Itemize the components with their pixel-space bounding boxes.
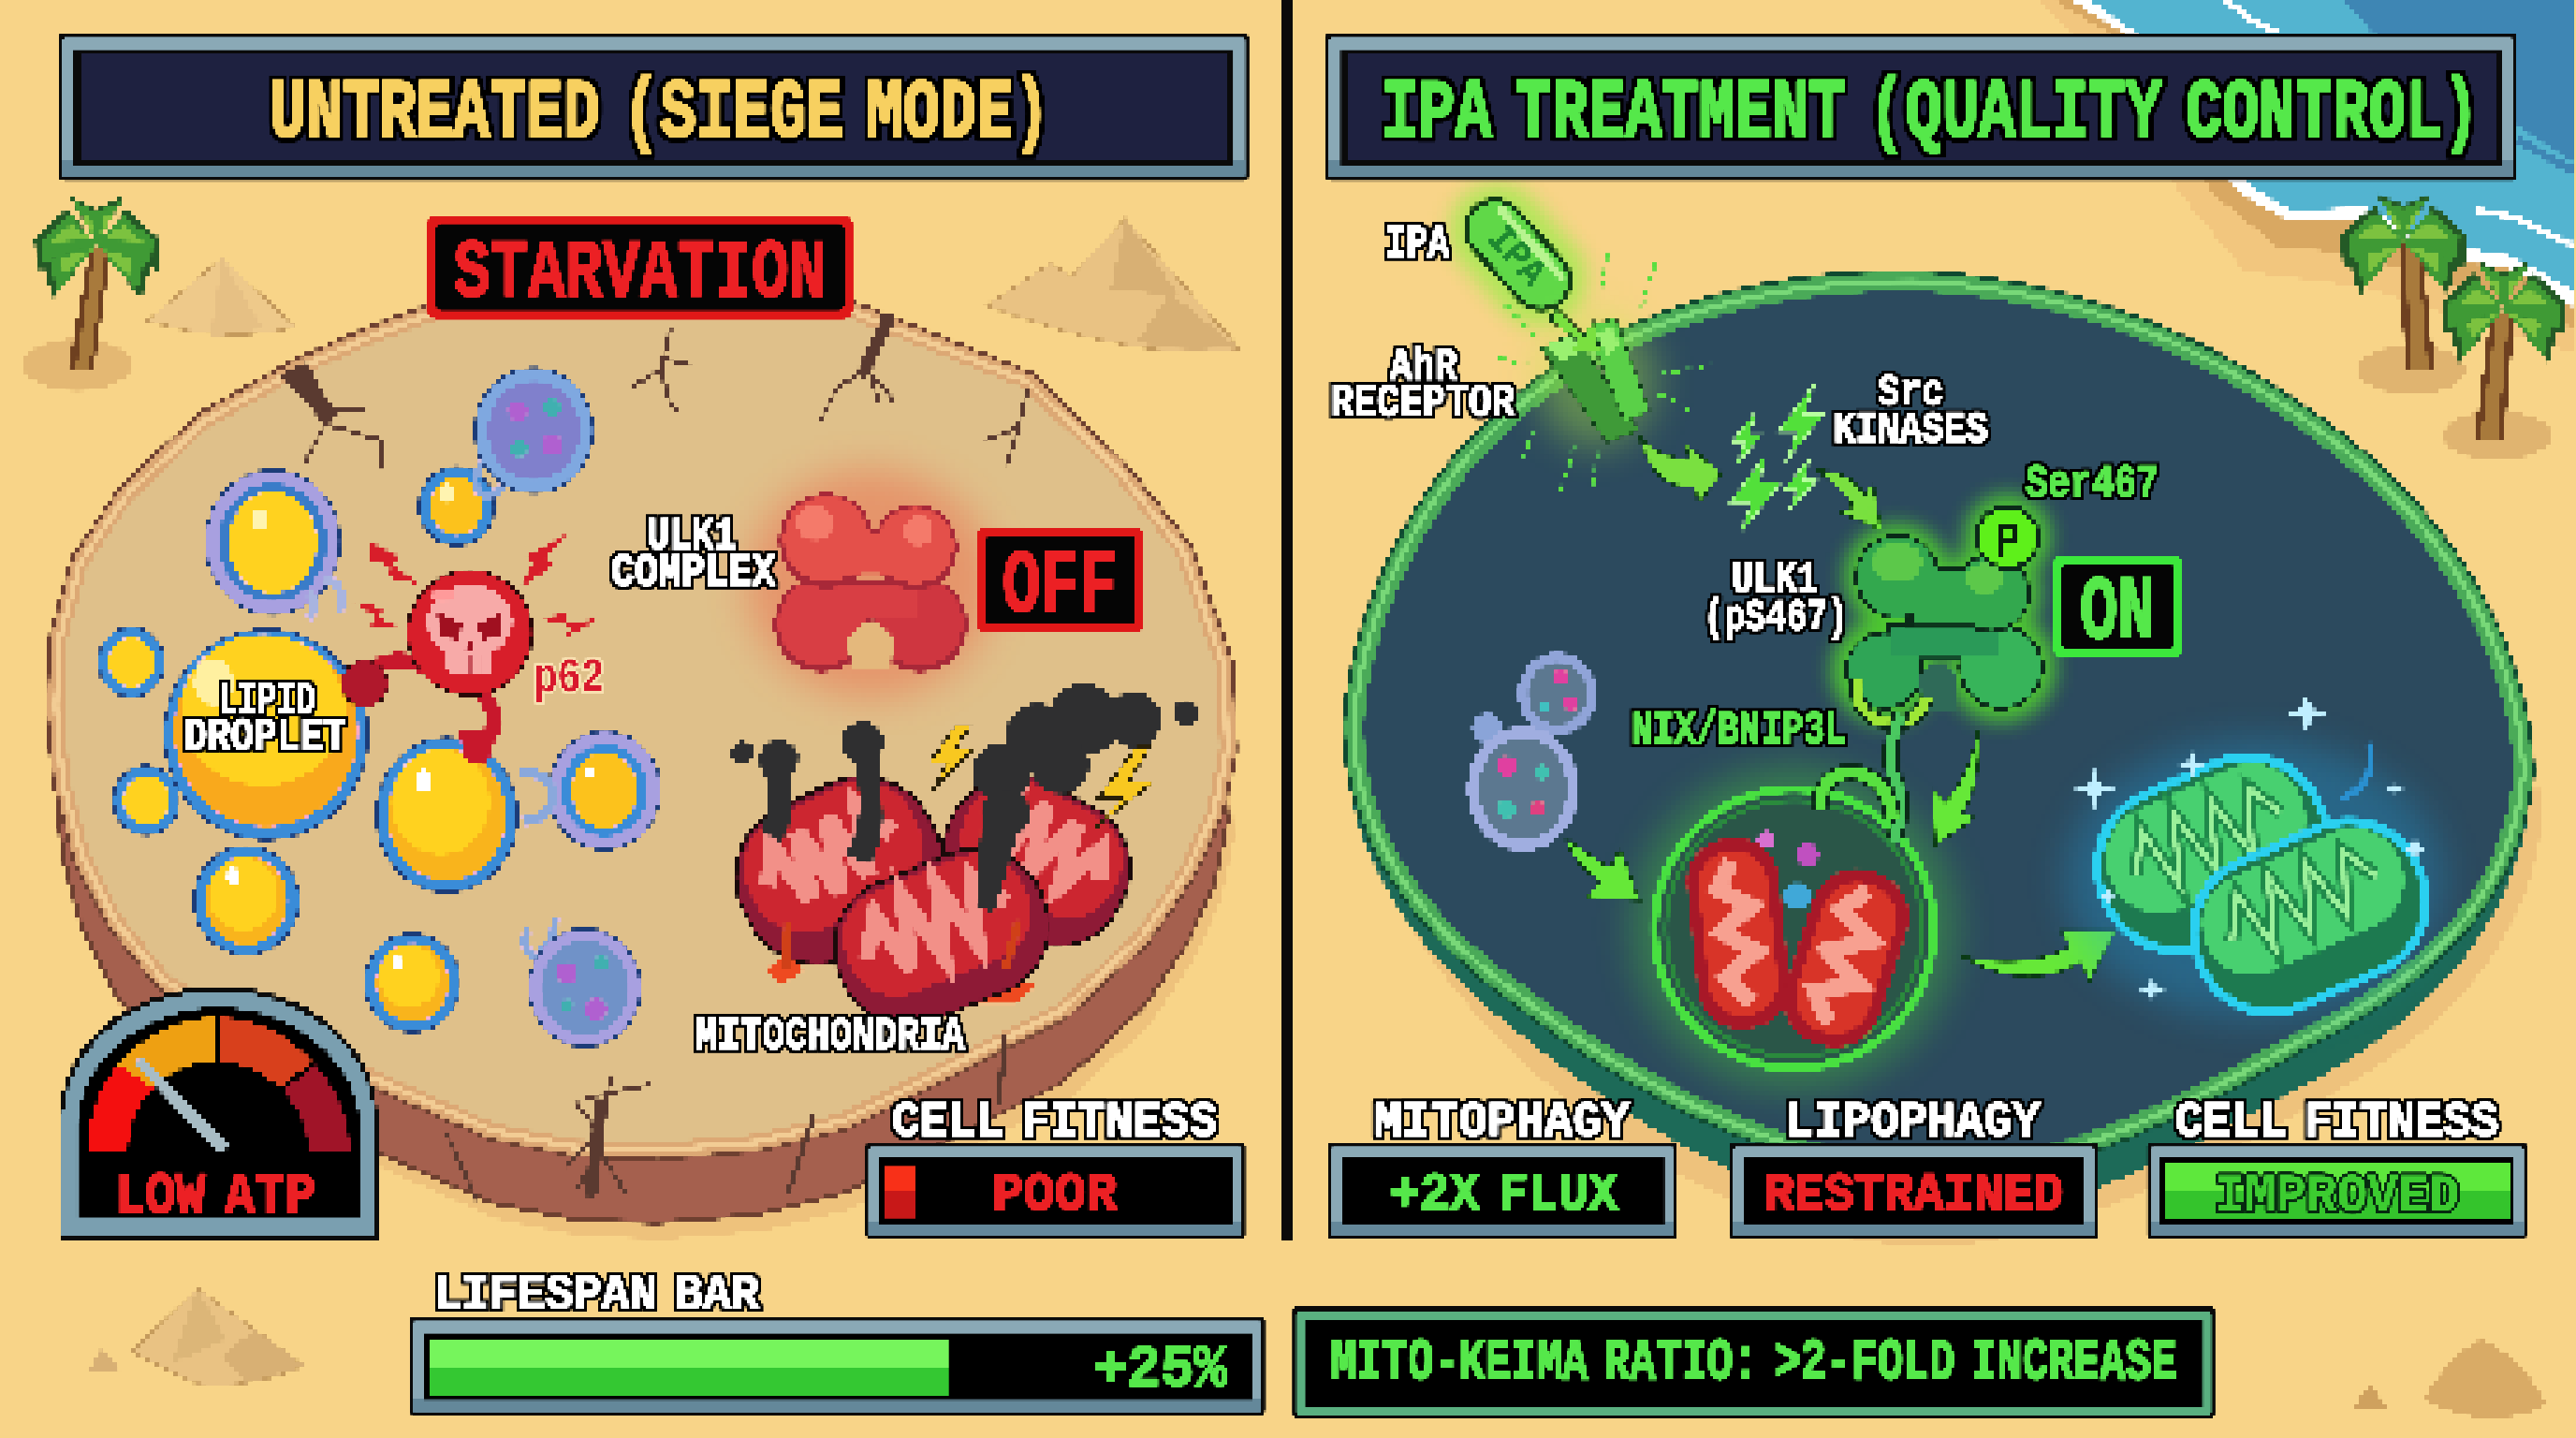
healthy mitochondria bbox=[2065, 694, 2455, 1042]
label: src kinases bbox=[1834, 369, 1988, 456]
title bar: ipa treatment bbox=[1325, 33, 2517, 181]
icon: p62 skull bbox=[342, 535, 600, 766]
arrows: flow to autophagosome and to healthy mitochondria bbox=[1566, 729, 2116, 981]
ulk1 active complex (green) with P: P bbox=[1995, 514, 2021, 570]
ulk1 active complex (green) with P bbox=[1832, 494, 2056, 723]
label: lipid droplet: LIPID bbox=[218, 675, 315, 727]
panel: untreated (siege mode) bbox=[56, 33, 1249, 1240]
label: lipophagy: LIPOPHAGY bbox=[1786, 1094, 2041, 1151]
lysosomes bbox=[419, 368, 640, 1047]
badge: off: OFF bbox=[1003, 536, 1117, 638]
badge: on: ON bbox=[2080, 563, 2156, 665]
label: ahr receptor: RECEPTOR bbox=[1331, 377, 1515, 430]
membrane cracks bbox=[283, 315, 1027, 1199]
label: ipa: IPA bbox=[1385, 218, 1449, 271]
label: mitophagy: MITOPHAGY bbox=[1373, 1094, 1630, 1151]
label: cell fitness (treated): CELL FITNESS bbox=[2175, 1094, 2499, 1151]
atp gauge frame bbox=[59, 986, 378, 1240]
label: src kinases: KINASES bbox=[1834, 406, 1988, 456]
label: ahr receptor bbox=[1331, 341, 1515, 430]
icon: src kinase sparks bbox=[1730, 383, 1823, 535]
smoke plumes bbox=[731, 683, 1199, 912]
cell: healthy dark cytoplasm with green membrane bbox=[1344, 271, 2543, 1246]
label: ulk1 complex: COMPLEX bbox=[611, 547, 776, 599]
label: ahr receptor: AhR bbox=[1390, 341, 1457, 393]
cell: starving, cracked membrane bbox=[56, 313, 1234, 1240]
status box: restrained: RESTRAINED bbox=[1764, 1166, 2063, 1226]
autophagosome with damaged mitochondria bbox=[1633, 715, 1955, 1090]
icon: ipa pill bbox=[1430, 164, 1606, 345]
status box: poor bbox=[866, 1142, 1245, 1240]
icon: ahr receptor bbox=[1499, 255, 1712, 493]
label: ulk1 complex: ULK1 bbox=[648, 510, 736, 563]
damaged mitochondria bbox=[710, 751, 1154, 1047]
callout: mito-keima ratio: MITO-KEIMA RATIO: >2-FOLD INCREASE bbox=[1331, 1329, 2177, 1397]
label: ipa on pill: IPA bbox=[1477, 217, 1555, 297]
lightning bolts bbox=[929, 725, 1153, 829]
badge: starvation bbox=[427, 215, 853, 321]
label: cell fitness (untreated): CELL FITNESS bbox=[892, 1094, 1218, 1151]
label: lifespan bar: LIFESPAN BAR bbox=[433, 1267, 759, 1323]
label: mitochondria: MITOCHONDRIA bbox=[695, 1010, 965, 1063]
label: nix/bnip3l: NIX/BNIP3L bbox=[1632, 704, 1847, 756]
label: src kinases: Src bbox=[1878, 369, 1943, 418]
label: ulk1 ps467: (pS467) bbox=[1704, 594, 1848, 643]
palm trees, right bbox=[2341, 192, 2566, 461]
callout: mito-keima ratio bbox=[1293, 1307, 2215, 1418]
label: ulk1 complex bbox=[611, 510, 776, 599]
status box: improved: IMPROVED bbox=[2215, 1167, 2459, 1228]
label: ulk1 ps467: ULK1 bbox=[1732, 556, 1819, 606]
vesicles bbox=[1467, 653, 1597, 851]
panel: ipa treatment (quality control) bbox=[1325, 33, 2543, 1246]
footer metrics bbox=[409, 1267, 2215, 1418]
label: ser467: Ser467 bbox=[2026, 458, 2159, 510]
label: lipid droplet: DROPLET bbox=[184, 711, 346, 763]
label: p62: p62 bbox=[534, 651, 605, 707]
divider between panels bbox=[1281, 0, 1293, 1240]
lifespan bar: +25% bbox=[409, 1316, 1265, 1415]
lipid droplets bbox=[98, 470, 661, 1032]
label: lipid droplet bbox=[184, 675, 346, 763]
lifespan bar: +25%: +25% bbox=[1094, 1336, 1227, 1403]
label: low atp: LOW ATP bbox=[115, 1163, 315, 1230]
status box: +2x flux: +2X FLUX bbox=[1390, 1166, 1618, 1226]
status box: +2x flux bbox=[1327, 1142, 1677, 1240]
status box: improved bbox=[2147, 1142, 2526, 1240]
ulk1 complex off (red) bbox=[746, 468, 996, 698]
arrows: signalling path bbox=[1640, 437, 1881, 529]
status box: poor: POOR bbox=[992, 1166, 1118, 1226]
label: ulk1 ps467 bbox=[1704, 556, 1848, 643]
title bar: untreated bbox=[59, 33, 1249, 181]
title bar: untreated: UNTREATED (SIEGE MODE) bbox=[270, 66, 1050, 162]
status box: restrained bbox=[1730, 1142, 2098, 1240]
badge: starvation: STARVATION bbox=[453, 228, 827, 321]
